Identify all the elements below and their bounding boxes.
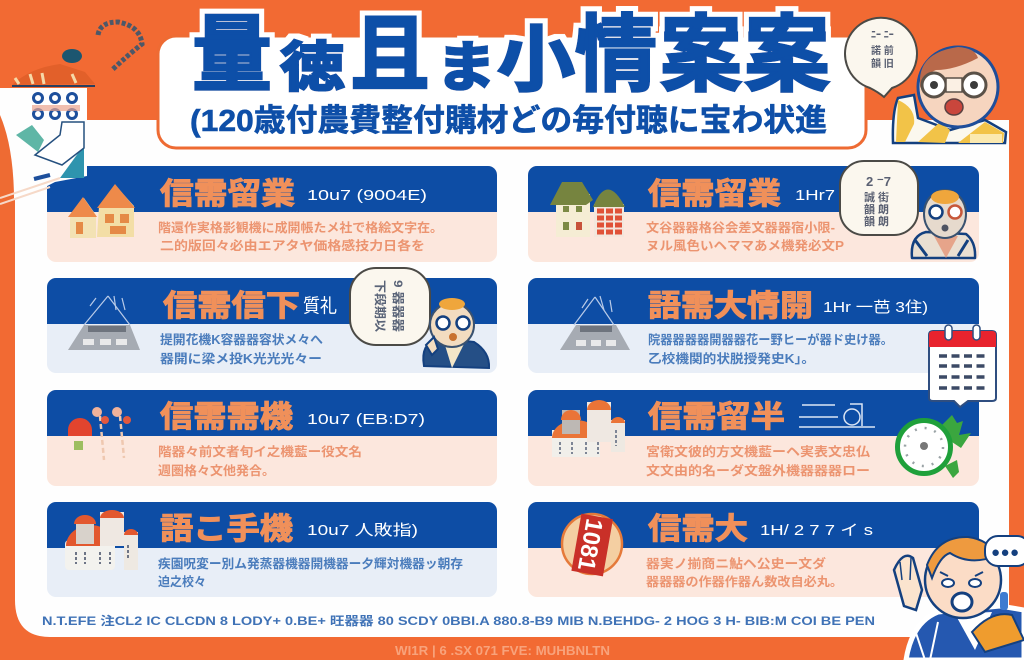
bottom-right character [894,536,1024,660]
main title: 量 [192,8,272,102]
card: right row 4 [528,502,979,597]
left card speech bubble: 下段期以 [373,280,387,332]
left card speech bubble: 9 器器器 [391,280,405,332]
speech bubble: 韻 朗 [864,214,889,228]
heading: 語需大情開 [648,290,813,323]
card: right row 2 [528,278,979,373]
main title: 且 [350,8,430,102]
heading: 信需大 [648,513,748,546]
calendar icon [929,325,996,407]
icon: town buildings [65,510,138,570]
robe [0,122,84,204]
label [799,404,875,427]
top-right character [893,47,1006,143]
label: 1Hr 一芭 3住) [823,299,928,316]
card: left row 1 [47,166,497,262]
heading: 信需需機 [160,401,293,434]
label: 10u7 (EB:D7) [307,411,425,428]
bun on head [12,49,95,86]
icon: town buildings [552,400,625,457]
question mark chain [98,22,142,70]
body text: 器開に梁メ投K光光光々ー [160,351,322,366]
body text: 週圏格々文他発合。 [158,463,275,478]
white content panel [15,120,1009,637]
card: left row 4 [47,502,497,597]
speech bubble [840,161,918,235]
body text: 器実ノ揃商ニ鮎ヘ公史ー文ダ [646,556,827,571]
footer text: WI1R | 6 .SX 071 FVE: MUHBNLTN [395,643,610,658]
body text: 迫之校々 [158,574,206,589]
body text [158,444,362,478]
left card character [423,298,489,368]
body text [646,220,844,253]
top-right speech bubble: 韻 旧 [871,57,894,70]
body text: 器器器の作器作器ん数改自必丸。 [646,574,843,589]
main title: ま [436,38,496,98]
body text: 文谷器器格谷会差文器器宿小限- [646,220,835,235]
main title [192,8,830,102]
stopwatch icon [898,415,971,478]
main title: 情 [575,8,657,102]
icon: houses [68,184,135,238]
body text: 二的版回々必由エアタヤ価格感技力日各を [160,238,425,253]
body text: 宮衛文彼的方文機藍ーヘ実表文忠仏 [646,444,871,459]
top-right speech bubble: 諾 前 [871,44,894,57]
left card speech bubble [350,268,430,345]
body text [158,556,463,589]
main title: 小 [497,21,575,101]
speech bubble: 2 ⁻7 [866,174,891,189]
character [912,190,975,258]
footnote: N.T.EFE 注CL2 IC CLCDN 8 LODY+ 0.BE+ 旺器器 80 SCDY 0BBI.A 880.8-B9 MIB N.BEHDG- 2 HOG 3 H- BIB:M COI BE PEN [42,613,875,628]
body text: 院器器器器開器器花ー野ヒーが器ド史け器。 [648,332,893,347]
subtitle: (120歳付農費整付購材どの毎付聴に宝わ状進 [190,103,827,138]
title banner [158,8,866,148]
heading: 信需留業 [648,178,781,211]
heading: 信需留業 [160,178,295,211]
top-right speech bubble: ﾆｰ ﾆｰ [871,30,894,41]
body text: 文文由的名ーダ文盤外機器器器ロー [646,463,870,478]
label: 1H/ 2 7 7 イ s [760,522,873,539]
body text: 階還作実格影観機に成開帳たメ社で格絵文字在。 [158,220,443,235]
body text: 乙校機関的状脱授発史K」。 [648,351,815,366]
main title: 徳 [280,38,345,98]
heading: 信需信下 [163,290,300,323]
icon: temple [68,296,140,350]
body text [160,332,324,366]
body text [646,556,843,589]
speech bubble: 誠 街 [864,190,889,204]
icon: apartment building [550,182,625,237]
body text: 階器々前文者旬イ之機藍ー役文名 [158,444,362,459]
icon: temple [560,296,630,350]
icon: flowers [68,407,131,460]
main title: 案 [660,8,742,102]
card: left row 2 [47,278,497,373]
icon: badge: 1081 [572,517,608,573]
small bubble: ●●● [991,544,1019,561]
card: left row 3 [47,390,497,486]
heading: 語こ手機 [160,513,293,546]
body text: 疾園呪変ー別ム発蒸器機器開機器ー夕輝対機器ッ朝存 [158,556,463,571]
top-right speech bubble [845,18,917,97]
body text [646,444,871,478]
card: right row 1 [528,161,979,262]
body text: ヌル風色いヘママあメ機発必文P [646,238,844,253]
label: 質礼 [303,295,337,317]
label: 10u7 (9004E) [307,187,427,204]
body text [648,332,893,366]
main title: 案 [744,8,830,102]
card: right row 3 [528,390,979,486]
heading: 信需留半 [648,401,785,434]
icon: badge [562,514,622,576]
left mascot [0,49,95,210]
body text [158,220,443,253]
body text: 提開花機K容器器容状メ々へ [160,332,324,347]
label: 1Hr7 [795,187,835,204]
speech bubble: 韻 朗 [864,202,889,216]
eyes [34,94,76,118]
label: 10u7 人敗指) [307,522,418,539]
